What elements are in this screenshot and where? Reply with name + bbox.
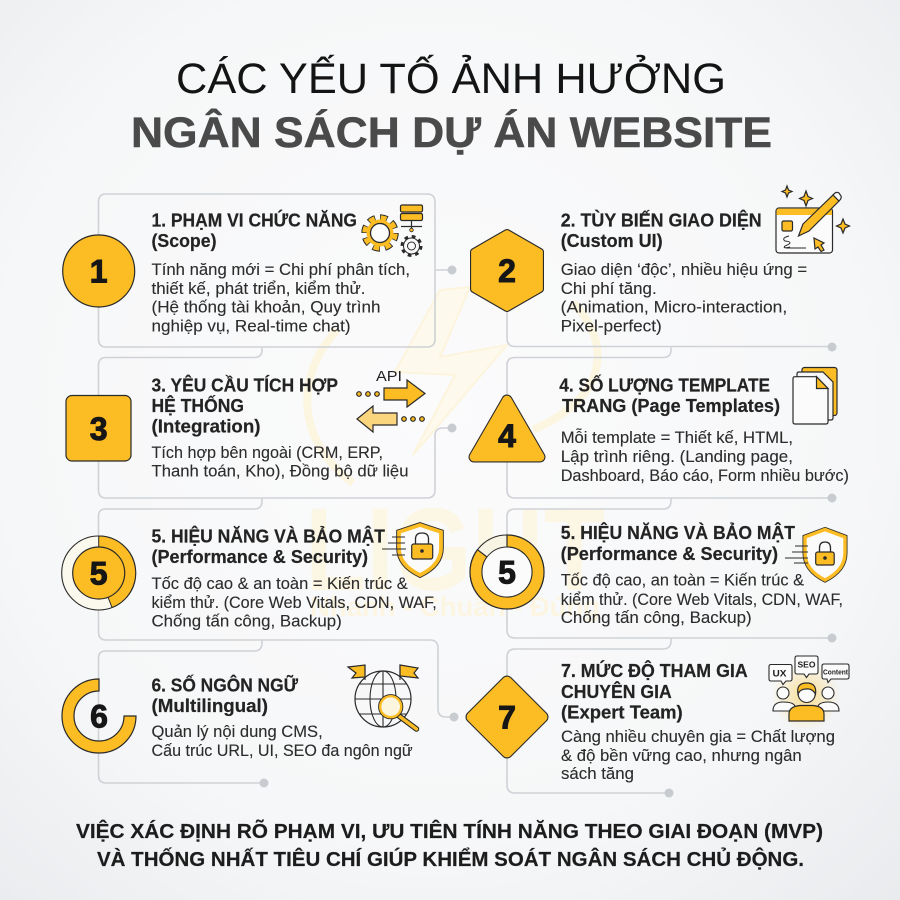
heading: performance left (152, 526, 385, 567)
watermark: logo and brand: Nhanh - Chuẩn - Đúng (310, 591, 600, 622)
badge: 7 diamond: 7 (498, 700, 516, 736)
icon: globe with flags and magnifier (348, 665, 418, 729)
heading: expert team: 7. MỨC ĐỘ THAM GIA (561, 660, 748, 681)
icon: API arrows: API (376, 368, 402, 385)
heading: custom UI (561, 210, 762, 251)
watermark: logo and brand (305, 287, 605, 622)
text: performance left description (152, 574, 437, 631)
text: performance left description: Chống tấn công, Backup) (152, 612, 342, 631)
icon: API arrows (357, 368, 425, 432)
heading: page templates (559, 375, 780, 416)
text: multilingual description (152, 722, 413, 760)
text: performance right description: Chống tấn công, Backup) (561, 608, 752, 627)
icon: shield with lock, right (785, 530, 845, 580)
icon: expert team with speech bubbles: Content (823, 668, 848, 676)
text: scope description: (Hệ thống tài khoản, Quy trình (152, 298, 380, 317)
text: expert team description: sách tăng (561, 764, 634, 783)
badge: 5 ring, right: 5 (498, 554, 516, 590)
panel: 4 page templates (474, 348, 849, 502)
heading: performance right: 5. HIỆU NĂNG VÀ BẢO MẬT (561, 522, 795, 543)
text: expert team description: & độ bền vững cao, nhưng ngân (561, 746, 802, 765)
badge: 2 hexagon: 2 (498, 253, 516, 289)
heading: performance right (561, 522, 795, 564)
badge: 5 ring, right (470, 535, 544, 609)
panel: 6 multilingual (62, 640, 418, 788)
text: scope description: Tính năng mới = Chi phí phân tích, (152, 260, 410, 279)
text: expert team description: Càng nhiều chuyên gia = Chất lượng (561, 727, 835, 746)
panel: 5 performance and security, left (62, 498, 458, 722)
panel: 3 integration (66, 348, 456, 498)
heading: integration: (Integration) (152, 416, 260, 436)
badge: 3 square: 3 (90, 411, 108, 447)
closing statement: VÀ THỐNG NHẤT TIÊU CHÍ GIÚP KHIỂM SOÁT NGÂN SÁCH CHỦ ĐỘNG. (97, 847, 804, 871)
icon: browser window and pencil (776, 186, 850, 253)
badge: 3 square (66, 396, 131, 461)
text: performance left description: Tốc độ cao & an toàn = Kiến trúc & (152, 574, 408, 593)
text: custom UI description: Chi phí tăng. (561, 279, 657, 298)
text: custom UI description: (Animation, Micro-interaction, (561, 298, 787, 317)
text: integration description: Tích hợp bên ngoài (CRM, ERP, (152, 443, 383, 462)
text: custom UI description (561, 260, 807, 336)
badge: 6 partial ring (62, 679, 136, 753)
text: multilingual description: Cấu trúc URL, UI, SEO đa ngôn ngữ (152, 741, 413, 760)
badge: 4 triangle: 4 (498, 418, 516, 454)
title: NGÂN SÁCH DỰ ÁN WEBSITE (131, 108, 772, 157)
panel: 1 scope (63, 194, 456, 347)
title: CÁC YẾU TỐ ẢNH HƯỞNG (176, 54, 726, 103)
heading: performance right: (Performance & Security) (561, 544, 778, 564)
badge: 2 hexagon (474, 233, 540, 308)
heading: performance left: 5. HIỆU NĂNG VÀ BẢO MẬT (152, 526, 385, 547)
badge: 7 diamond (472, 682, 542, 752)
heading: page templates: TRANG (Page Templates) (562, 396, 780, 416)
badge: 4 triangle (474, 400, 540, 457)
title (131, 54, 772, 157)
text: integration description: Thanh toán, Kho), Đồng bộ dữ liệu (152, 462, 408, 481)
heading: integration (152, 375, 338, 436)
icon: shield with lock, left (382, 525, 441, 575)
text: page templates description: Dashboard, Báo cáo, Form nhiều bước) (561, 466, 849, 485)
closing statement (76, 819, 823, 871)
text: custom UI description: Giao diện ‘độc’, nhiều hiệu ứng = (561, 260, 807, 279)
text: page templates description: Mỗi template = Thiết kế, HTML, (561, 428, 793, 447)
heading: expert team (561, 660, 748, 722)
icon: expert team with speech bubbles: UX (772, 668, 786, 678)
panel: 7 expert team (472, 638, 849, 798)
heading: custom UI: (Custom UI) (561, 231, 663, 251)
heading: scope (152, 210, 357, 251)
text: scope description (152, 260, 410, 336)
icon: expert team with speech bubbles (769, 656, 849, 730)
badge: 5 ring, left: 5 (90, 556, 108, 592)
text: performance left description: kiểm thử. (Core Web Vitals, CDN, WAF, (152, 593, 437, 612)
badge: 1 circle: 1 (90, 254, 108, 290)
heading: expert team: (Expert Team) (561, 702, 683, 722)
text: performance right description: Tốc độ cao, an toàn = Kiến trúc & (561, 571, 805, 590)
closing statement: VIỆC XÁC ĐỊNH RÕ PHẠM VI, ƯU TIÊN TÍNH NĂNG THEO GIAI ĐOẠN (MVP) (76, 819, 823, 843)
badge: 1 circle (63, 235, 135, 307)
panel: 2 custom UI (474, 186, 850, 352)
heading: multilingual: 6. SỐ NGÔN NGỮ (152, 675, 298, 696)
text: integration description (152, 443, 408, 481)
badge: 6 partial ring: 6 (90, 698, 108, 734)
text: custom UI description: Pixel-perfect) (561, 317, 662, 336)
heading: scope: (Scope) (152, 231, 216, 251)
text: performance right description (561, 571, 843, 627)
heading: custom UI: 2. TÙY BIẾN GIAO DIỆN (561, 210, 762, 230)
text: page templates description: Lập trình riêng. (Landing page, (561, 447, 793, 466)
icon: stacked pages (793, 368, 837, 424)
badge: 5 ring, left (62, 536, 136, 610)
text: scope description: thiết kế, phát triển, kiểm thử. (152, 279, 366, 298)
heading: expert team: CHUYÊN GIA (561, 681, 672, 702)
icon: gears and server (365, 205, 422, 254)
text: page templates description (561, 428, 849, 485)
heading: performance left: (Performance & Security) (152, 547, 368, 567)
heading: multilingual: (Multilingual) (152, 696, 268, 716)
heading: multilingual (152, 675, 298, 716)
icon: expert team with speech bubbles: SEO (798, 660, 816, 670)
heading: integration: HỆ THỐNG (152, 395, 244, 416)
text: performance right description: kiểm thử. (Core Web Vitals, CDN, WAF, (561, 590, 843, 609)
heading: integration: 3. YÊU CẦU TÍCH HỢP (152, 375, 338, 396)
watermark: logo and brand: LIGHT (305, 484, 605, 616)
text: expert team description (561, 727, 835, 783)
text: scope description: nghiệp vụ, Real-time chat) (152, 317, 350, 336)
heading: page templates: 4. SỐ LƯỢNG TEMPLATE (559, 375, 770, 396)
panel: 5 performance and security, right (470, 498, 845, 642)
text: multilingual description: Quản lý nội dung CMS, (152, 722, 323, 741)
heading: scope: 1. PHẠM VI CHỨC NĂNG (152, 210, 357, 230)
